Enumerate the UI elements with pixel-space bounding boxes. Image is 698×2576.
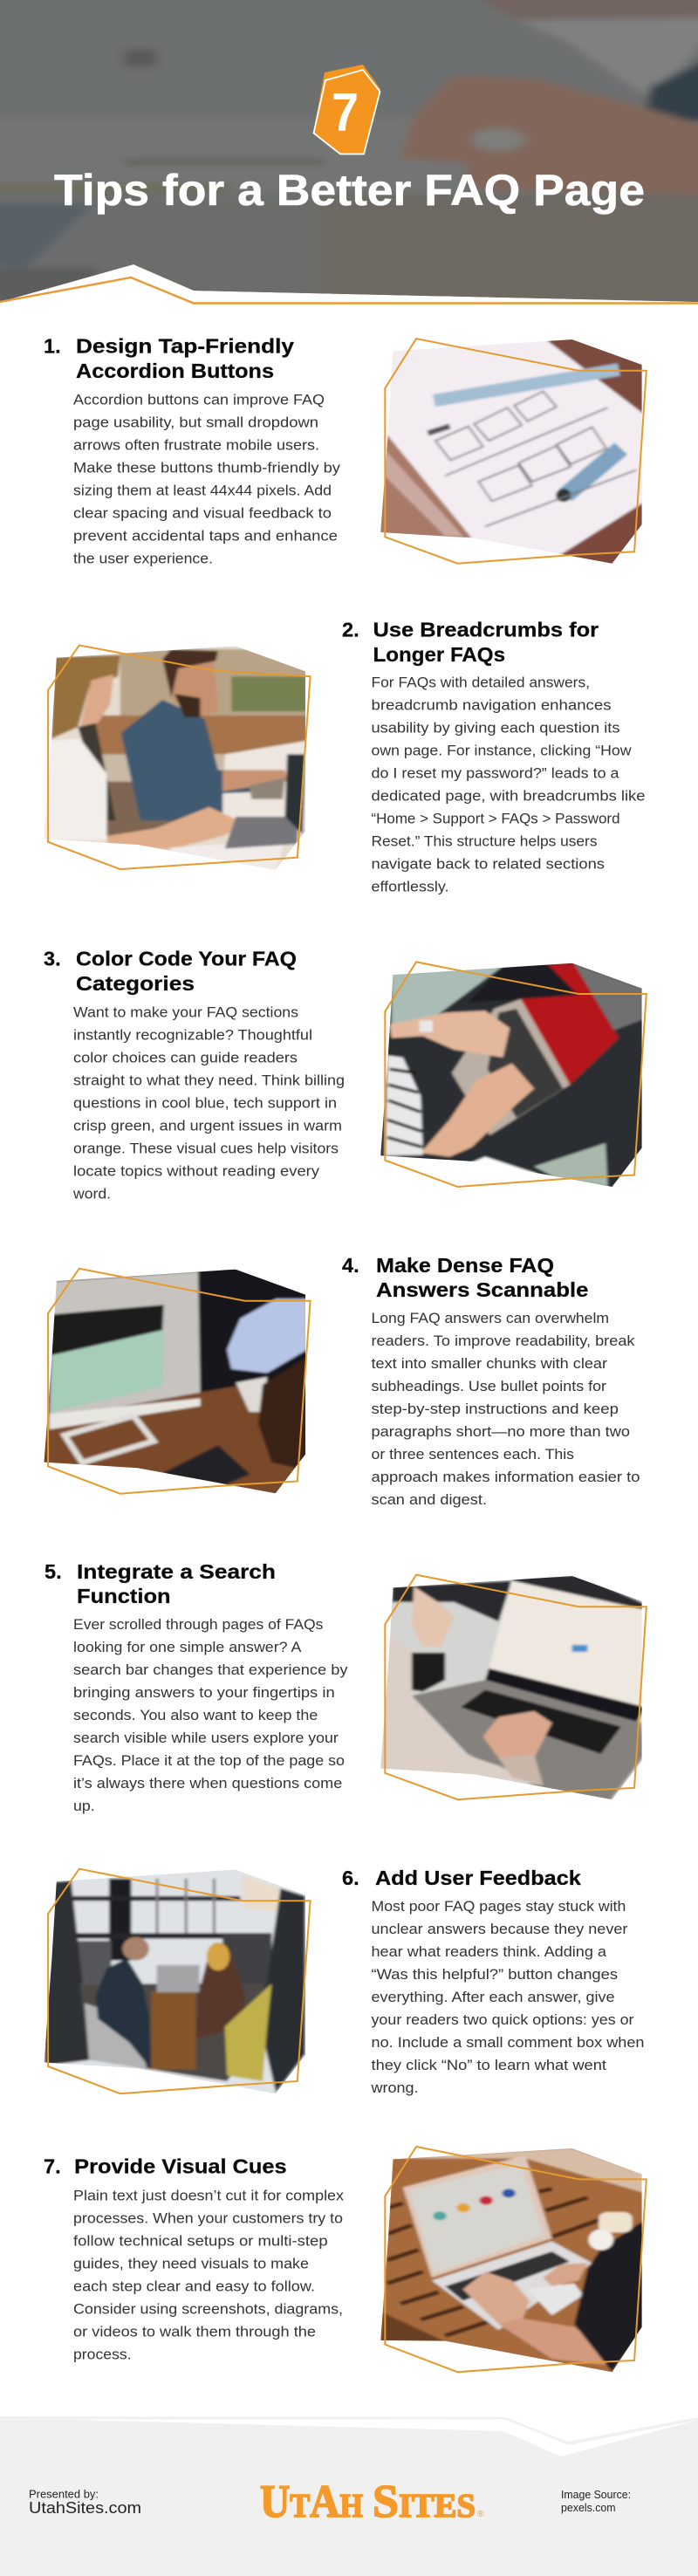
tip 5 body: Ever scrolled through pages of FAQs [73, 1617, 323, 1633]
tip 4 photo: monitor on a wooden desk [40, 1268, 311, 1497]
tip 5 body [73, 1617, 348, 1814]
tip 2 photo: two people working on laptops [40, 641, 311, 875]
tip 5 body: it’s always there when questions come [73, 1776, 342, 1792]
tip 4 body: text into smaller chunks with clear [372, 1356, 608, 1372]
tip 2 body: effortlessly. [372, 880, 448, 895]
tip 2 body [372, 675, 646, 895]
tip 2 heading: Use Breadcrumbs for [373, 619, 599, 641]
tip 6 heading: Add User Feedback [375, 1867, 582, 1889]
footer: Utah Sites logo: UTAH [260, 2477, 363, 2527]
tip 1 body: clear spacing and visual feedback to [73, 506, 332, 522]
tip 2 body: do I reset my password?” leads to a [372, 766, 619, 782]
tip 3 heading: Color Code Your FAQ [76, 947, 297, 969]
tip 3 body [72, 1004, 345, 1202]
tip 7 body: each step clear and easy to follow. [73, 2279, 315, 2295]
tip 1 text [44, 335, 341, 567]
tip 7 body: guides, they need visuals to make [73, 2257, 309, 2272]
badge: number 7 [313, 65, 380, 154]
tip 4 heading: Make Dense FAQ [376, 1254, 554, 1277]
tip 6 body: “Was this helpful?” button changes [372, 1967, 618, 1983]
tip 5 body: seconds. You also want to keep the [73, 1708, 318, 1723]
tip 4 heading: 4. [342, 1254, 359, 1277]
tip 1 body: Accordion buttons can improve FAQ [73, 393, 325, 408]
tip 7 photo: laptop on a wooden table [379, 2147, 647, 2374]
tip 6 body: wrong. [370, 2080, 419, 2096]
tip 7 body [73, 2189, 345, 2363]
tip 1 heading [44, 335, 294, 382]
tip 4 body [372, 1311, 640, 1508]
footer: presented by: UtahSites.com [29, 2499, 141, 2517]
tip 6 body: your readers two quick options: yes or [372, 2012, 634, 2028]
tip 6 body: hear what readers think. Adding a [372, 1944, 607, 1960]
footer: Utah Sites logo: SITES [373, 2477, 476, 2527]
tip 4 body: Long FAQ answers can overwhelm [372, 1311, 609, 1326]
tip 2 body: dedicated page, with breadcrumbs like [372, 789, 646, 805]
tip 1 photo: wireframe sketch on paper [374, 333, 650, 572]
tip 1 body [73, 393, 341, 567]
tip 4 body: readers. To improve readability, break [372, 1333, 635, 1349]
tip 3 text [44, 947, 345, 1202]
tip 4 body: approach makes information easier to [372, 1470, 640, 1485]
footer: image source: Image Source: [561, 2489, 631, 2501]
tip 6 body: everything. After each answer, give [372, 1990, 614, 2005]
header banner photo [0, 0, 698, 308]
footer: image source: pexels.com [561, 2502, 616, 2514]
tip 5 heading: 5. [44, 1560, 62, 1583]
tip 4 body: or three sentences each. This [372, 1447, 574, 1463]
tip 3 body: orange. These visual cues help visitors [73, 1141, 339, 1156]
tip 2 body: own page. For instance, clicking “How [372, 743, 632, 759]
tip 5 body: FAQs. Place it at the top of the page so [73, 1753, 345, 1769]
footer: presented by: Presented by: [29, 2489, 99, 2501]
footer: presented by [29, 2489, 141, 2517]
tip 2 body: For FAQs with detailed answers, [372, 675, 590, 691]
tip 5 photo: person using a laptop [379, 1572, 647, 1803]
tip 5 text [44, 1560, 348, 1814]
orange accent line under banner [0, 277, 698, 304]
tip 6 body [370, 1899, 644, 2096]
footer background [0, 2416, 698, 2576]
tip 5 body: bringing answers to your fingertips in [73, 1685, 335, 1701]
tip 6 body: Most poor FAQ pages stay stuck with [372, 1899, 626, 1915]
tip 2 heading: Longer FAQs [373, 643, 505, 666]
tip 2 body: breadcrumb navigation enhances [372, 698, 611, 714]
tip 6 body: unclear answers because they never [372, 1922, 628, 1937]
tip 6 heading: 6. [342, 1867, 359, 1889]
tip 1 heading: Accordion Buttons [76, 360, 274, 382]
tip 3 body: instantly recognizable? Thoughtful [73, 1027, 312, 1043]
badge: number 7: 7 [332, 83, 359, 143]
tip 4 body: step-by-step instructions and keep [372, 1401, 619, 1417]
tip 3 body: locate topics without reading every [73, 1163, 320, 1179]
tip 2 body: usability by giving each question its [372, 721, 619, 736]
tip 5 heading: Integrate a Search [77, 1560, 276, 1583]
tip 1 body: sizing them at least 44x44 pixels. Add [73, 483, 332, 499]
tip 3 heading: Categories [76, 972, 195, 995]
tip 5 body: search bar changes that experience by [73, 1662, 348, 1678]
tip 7 body: Plain text just doesn’t cut it for complex [73, 2189, 345, 2204]
tip 4 body: paragraphs short—no more than two [372, 1424, 630, 1440]
tip 2 text [342, 619, 646, 895]
tip 7 body: process. [73, 2347, 132, 2363]
tip 1 heading: 1. [44, 335, 61, 358]
tip 6 photo: two people meeting in a lounge pod [40, 1867, 311, 2097]
tip 7 heading: Provide Visual Cues [74, 2155, 287, 2178]
tip 3 body: color choices can guide readers [73, 1050, 298, 1065]
title: Tips for a Better FAQ Page [54, 166, 645, 215]
tip 7 body: follow technical setups or multi-step [73, 2234, 328, 2250]
tip 7 body: processes. When your customers try to [73, 2211, 343, 2227]
tip 5 heading: Function [77, 1585, 171, 1607]
tip 6 text [342, 1867, 644, 2096]
tip 1 heading: Design Tap-Friendly [76, 335, 294, 358]
tip 5 heading [44, 1560, 276, 1607]
tip 4 heading: Answers Scannable [376, 1278, 588, 1301]
tip 7 text [44, 2155, 345, 2363]
tip 7 body: Consider using screenshots, diagrams, [73, 2302, 343, 2318]
tip 2 body: Reset.” This structure helps users [372, 834, 597, 850]
tip 1 body: page usability, but small dropdown [73, 415, 318, 431]
tip 5 body: up. [73, 1798, 95, 1814]
tip 3 heading [44, 947, 297, 995]
tip 6 body: no. Include a small comment box when [372, 2035, 644, 2051]
tip 3 body: questions in cool blue, tech support in [73, 1095, 337, 1111]
tip 5 body: looking for one simple answer? A [73, 1640, 301, 1655]
tip 2 body: “Home > Support > FAQs > Password [372, 812, 619, 827]
footer: Utah Sites logo [260, 2477, 484, 2527]
tip 3 photo: hands typing on laptop with red screen [379, 960, 647, 1190]
tip 1 body: Make these buttons thumb-friendly by [73, 461, 341, 476]
footer: Utah Sites logo: ® [477, 2510, 484, 2519]
tip 4 body: subheadings. Use bullet points for [372, 1379, 607, 1394]
tip 2 heading: 2. [342, 619, 359, 641]
tip 4 text [342, 1254, 640, 1508]
tip 7 heading: 7. [44, 2155, 61, 2178]
tip 3 body: word. [72, 1186, 111, 1202]
tip 3 body: straight to what they need. Think billing [73, 1072, 345, 1088]
tip 6 body: they click “No” to learn what went [372, 2058, 606, 2073]
tip 7 body: or videos to walk them through the [73, 2325, 316, 2340]
tip 5 body: search visible while users explore your [73, 1730, 339, 1746]
tip 1 body: prevent accidental taps and enhance [73, 529, 338, 545]
tip 4 heading [342, 1254, 588, 1301]
tip 2 heading [342, 619, 599, 666]
tip 1 body: the user experience. [73, 552, 213, 567]
tip 2 body: navigate back to related sections [372, 857, 605, 873]
tip 3 body: crisp green, and urgent issues in warm [73, 1118, 342, 1134]
tip 3 heading: 3. [44, 947, 61, 969]
tip 4 body: scan and digest. [372, 1492, 487, 1508]
tip 3 body: Want to make your FAQ sections [73, 1004, 298, 1020]
footer: image source [561, 2489, 631, 2514]
tip 1 body: arrows often frustrate mobile users. [73, 438, 319, 454]
